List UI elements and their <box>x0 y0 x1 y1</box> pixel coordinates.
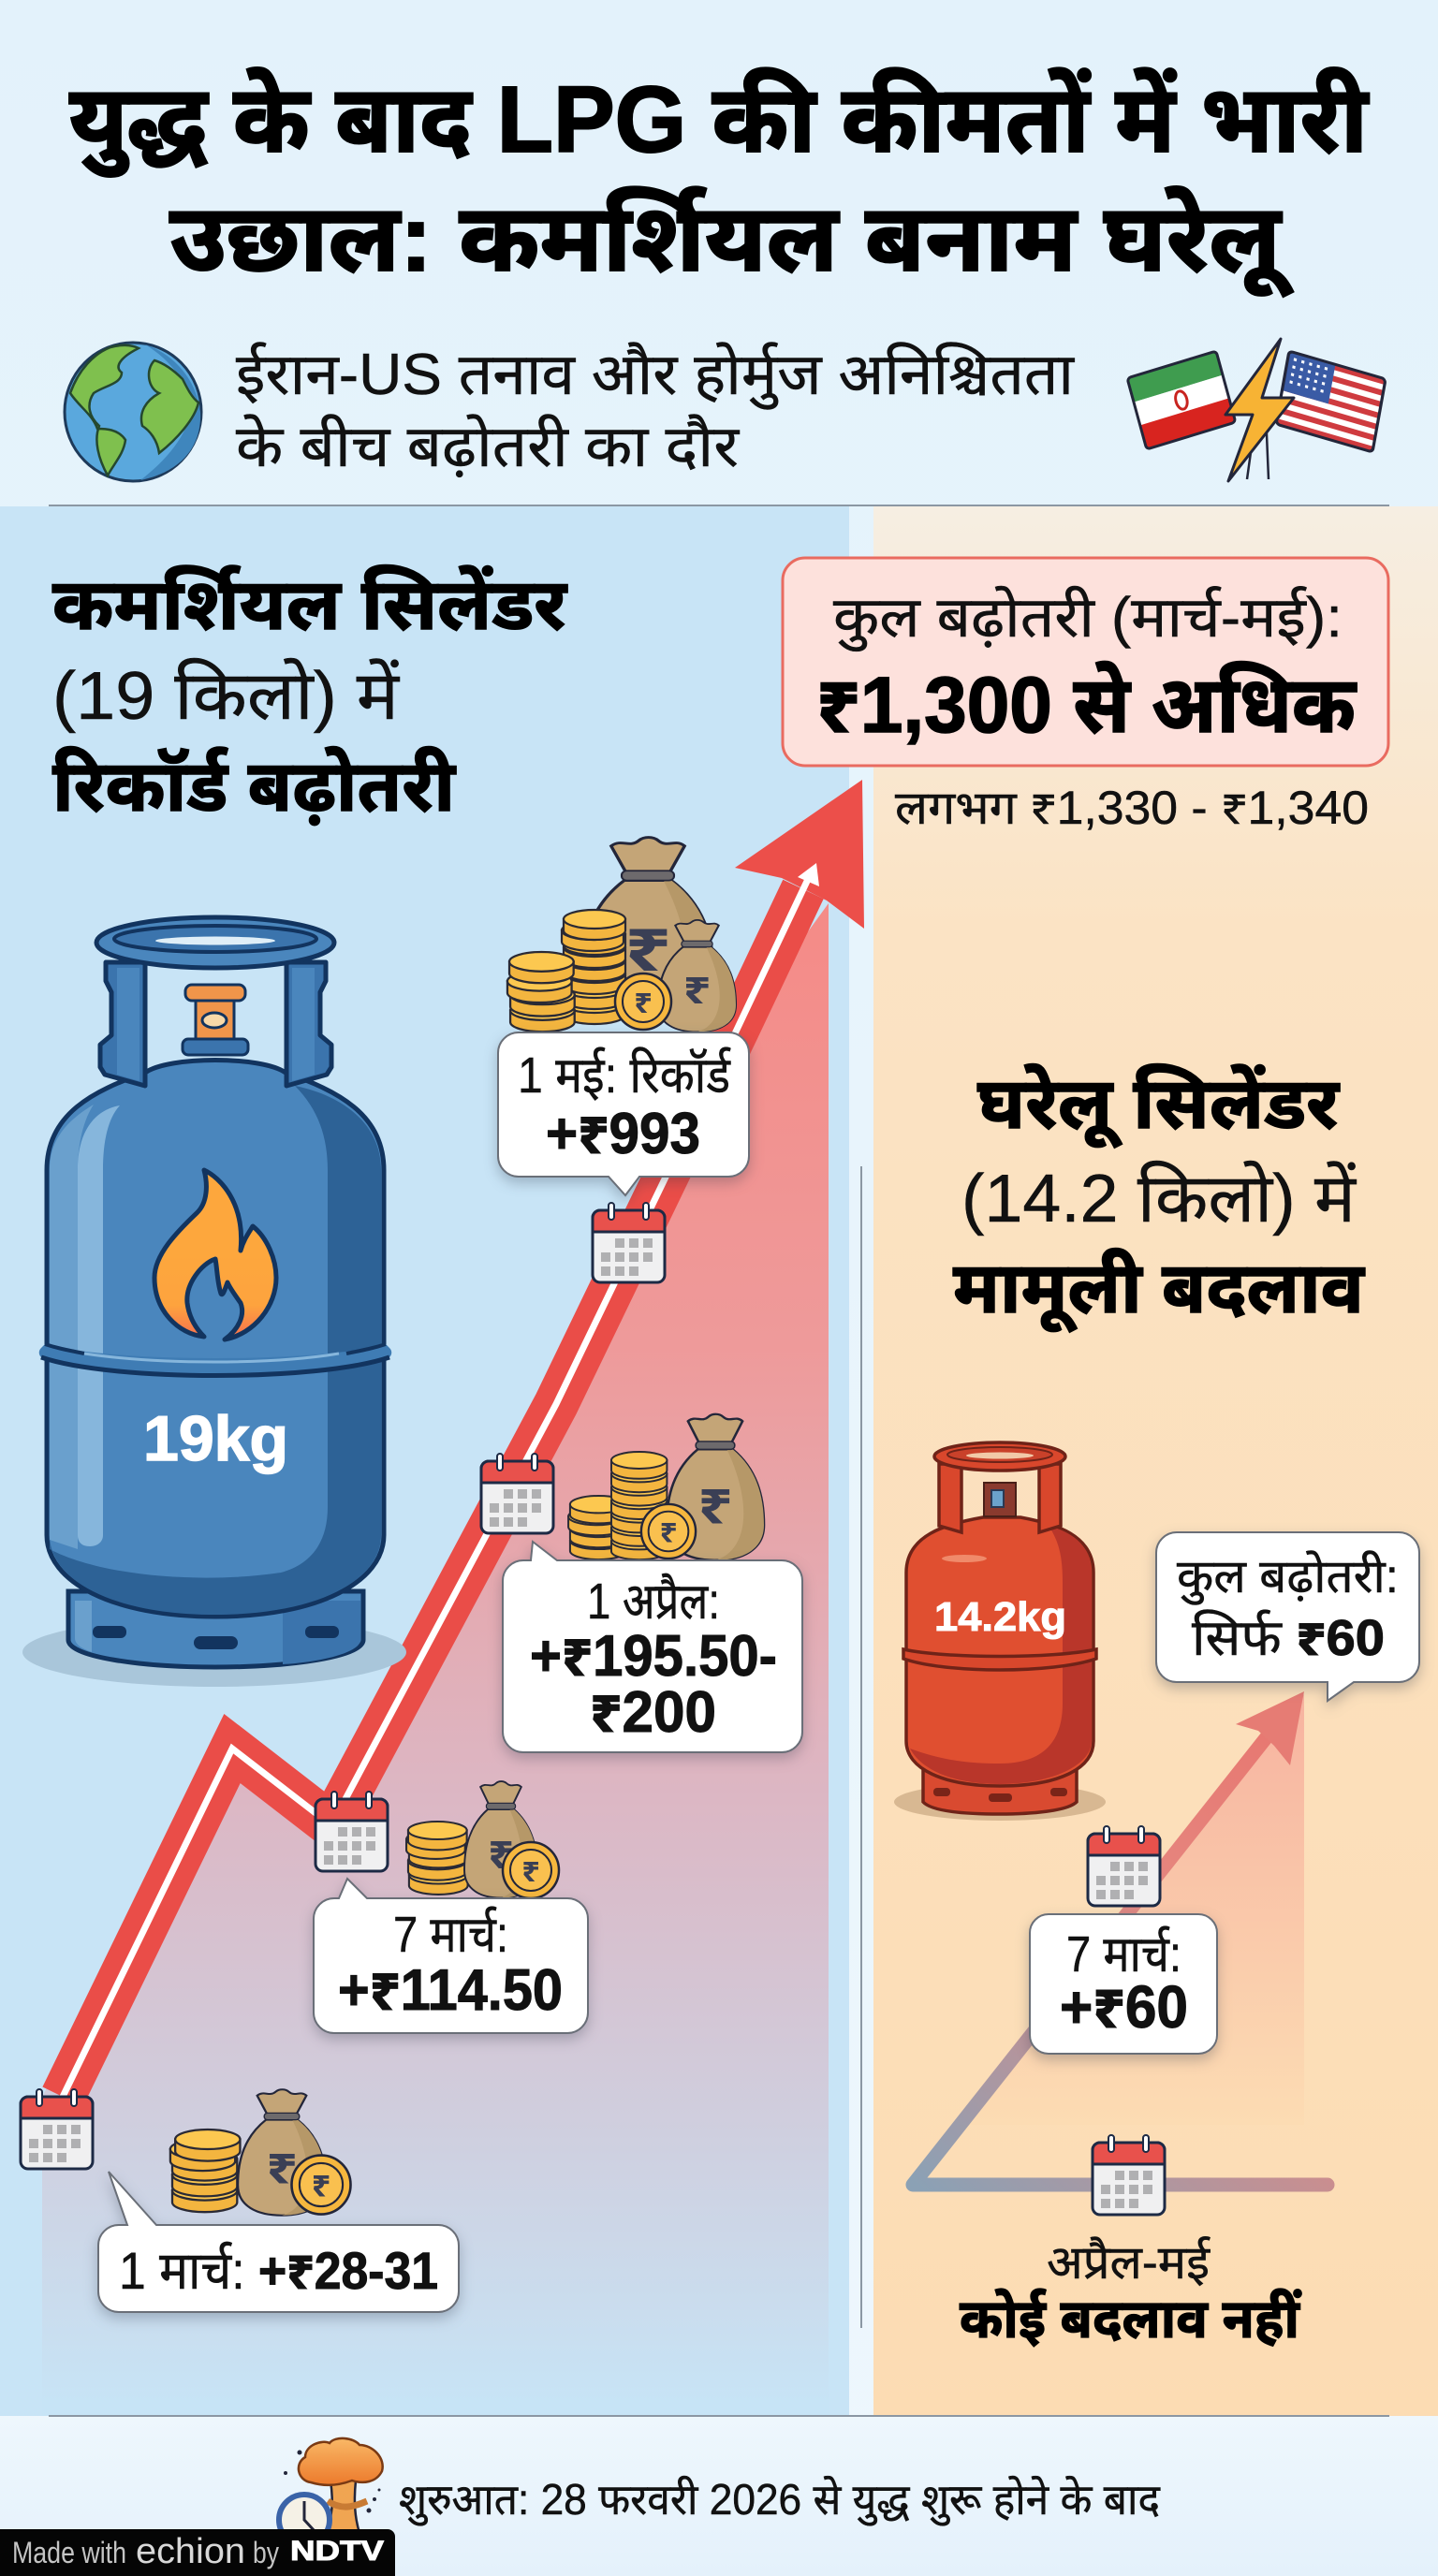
commercial heading: रिकॉर्ड बढ़ोतरी <box>52 746 457 827</box>
callout: 1 April: ₹200 <box>590 1680 716 1745</box>
callout: 7 March <box>314 1879 588 2033</box>
callout: 7 March: +₹114.50 <box>338 1958 563 2023</box>
callout: 7 March: 7 मार्च: <box>393 1906 508 1963</box>
icon: money 7 March <box>406 1781 559 1898</box>
commercial heading: कमर्शियल सिलेंडर <box>52 564 568 645</box>
callout: total commercial increase: कुल बढ़ोतरी (मार्च-मई): <box>833 586 1343 651</box>
domestic heading: घरेलू सिलेंडर <box>977 1063 1341 1148</box>
commercial heading: (19 किलो) में <box>52 658 401 734</box>
commercial cylinder <box>22 917 406 1687</box>
icon: Iran and US flags with lightning bolt <box>1127 339 1386 481</box>
domestic heading: मामूली बदलाव <box>953 1249 1365 1332</box>
subtitle: के बीच बढ़ोतरी का दौर <box>236 414 741 479</box>
icon: money 1 March <box>170 2089 350 2216</box>
footer background <box>0 2416 1438 2576</box>
title: उछाल: कमर्शियल बनाम घरेलू <box>169 186 1293 298</box>
domestic cylinder: 14.2kg <box>934 1594 1066 1640</box>
subtitle <box>236 342 1075 479</box>
calendar icon: 1 May <box>593 1203 665 1282</box>
icon: globe <box>65 343 201 481</box>
callout: 1 March: 1 मार्च: +₹28-31 <box>119 2241 438 2300</box>
domestic cylinder <box>894 1442 1106 1821</box>
area under commercial arrow <box>42 903 829 2416</box>
title: युद्ध के बाद LPG की कीमतों में भारी <box>69 67 1370 177</box>
domestic heading: (14.2 किलो) में <box>961 1161 1357 1237</box>
callout: total domestic: सिर्फ ₹60 <box>1192 1609 1385 1666</box>
commercial heading <box>52 564 568 827</box>
vertical separator <box>860 1166 862 2328</box>
divider top <box>49 505 1389 506</box>
chart: flat line and area domestic <box>913 1691 1328 2185</box>
icon: money 1 April <box>568 1414 764 1560</box>
footer note: शुरुआत: 28 फरवरी 2026 से युद्ध शुरू होने के बाद <box>399 2474 1161 2527</box>
domestic no change text: अप्रैल-मई <box>1047 2236 1211 2289</box>
badge: made with echion by NDTV <box>0 2529 395 2576</box>
callout: domestic 7 March: 7 मार्च: <box>1066 1925 1181 1983</box>
title <box>69 67 1370 298</box>
callout: domestic 7 March <box>1030 1914 1217 2054</box>
callout: 1 May: +₹993 <box>546 1102 700 1166</box>
calendar icon: domestic 7 March <box>1088 1826 1160 1906</box>
callout: total domestic <box>1156 1532 1419 1701</box>
callout: 1 April: +₹195.50- <box>530 1624 777 1689</box>
badge: made with echion by NDTV: by <box>253 2536 279 2569</box>
icon: money 1 May <box>507 838 736 1032</box>
domestic heading <box>953 1063 1365 1332</box>
calendar icon: 1 April <box>481 1454 553 1533</box>
callout: 1 April <box>503 1542 802 1752</box>
divider bottom <box>49 2415 1389 2417</box>
approximate range: लगभग ₹1,330 - ₹1,340 <box>895 782 1369 834</box>
callout: 1 May: 1 मई: रिकॉर्ड <box>518 1046 731 1104</box>
domestic no change text: कोई बदलाव नहीं <box>960 2289 1302 2349</box>
callout: domestic 7 March: +₹60 <box>1060 1973 1188 2041</box>
callout: total commercial increase: ₹1,300 से अधिक <box>816 661 1357 749</box>
callout: 1 May <box>498 1032 749 1195</box>
callout: 1 April: 1 अप्रैल: <box>587 1572 720 1630</box>
rising red arrow <box>63 780 864 2097</box>
calendar icon: 1 March <box>21 2089 93 2169</box>
callout: total commercial increase <box>783 558 1388 766</box>
panel: domestic cylinder background <box>873 506 1438 2416</box>
badge: made with echion by NDTV: NDTV <box>290 2536 384 2567</box>
badge: made with echion by NDTV: echion <box>136 2532 245 2571</box>
calendar icon: 7 March <box>315 1792 388 1871</box>
icon: mushroom cloud and clock <box>279 2438 383 2545</box>
calendar icon: domestic April-May <box>1093 2135 1165 2215</box>
callout: total domestic: कुल बढ़ोतरी: <box>1177 1550 1399 1605</box>
commercial cylinder: 19kg <box>143 1403 288 1474</box>
panel: commercial cylinder background <box>0 506 849 2416</box>
badge: made with echion by NDTV: Made with <box>12 2536 126 2569</box>
callout: 1 March <box>98 2172 459 2312</box>
subtitle: ईरान-US तनाव और होर्मुज अनिश्चितता <box>236 342 1075 410</box>
domestic no change text <box>960 2236 1302 2349</box>
